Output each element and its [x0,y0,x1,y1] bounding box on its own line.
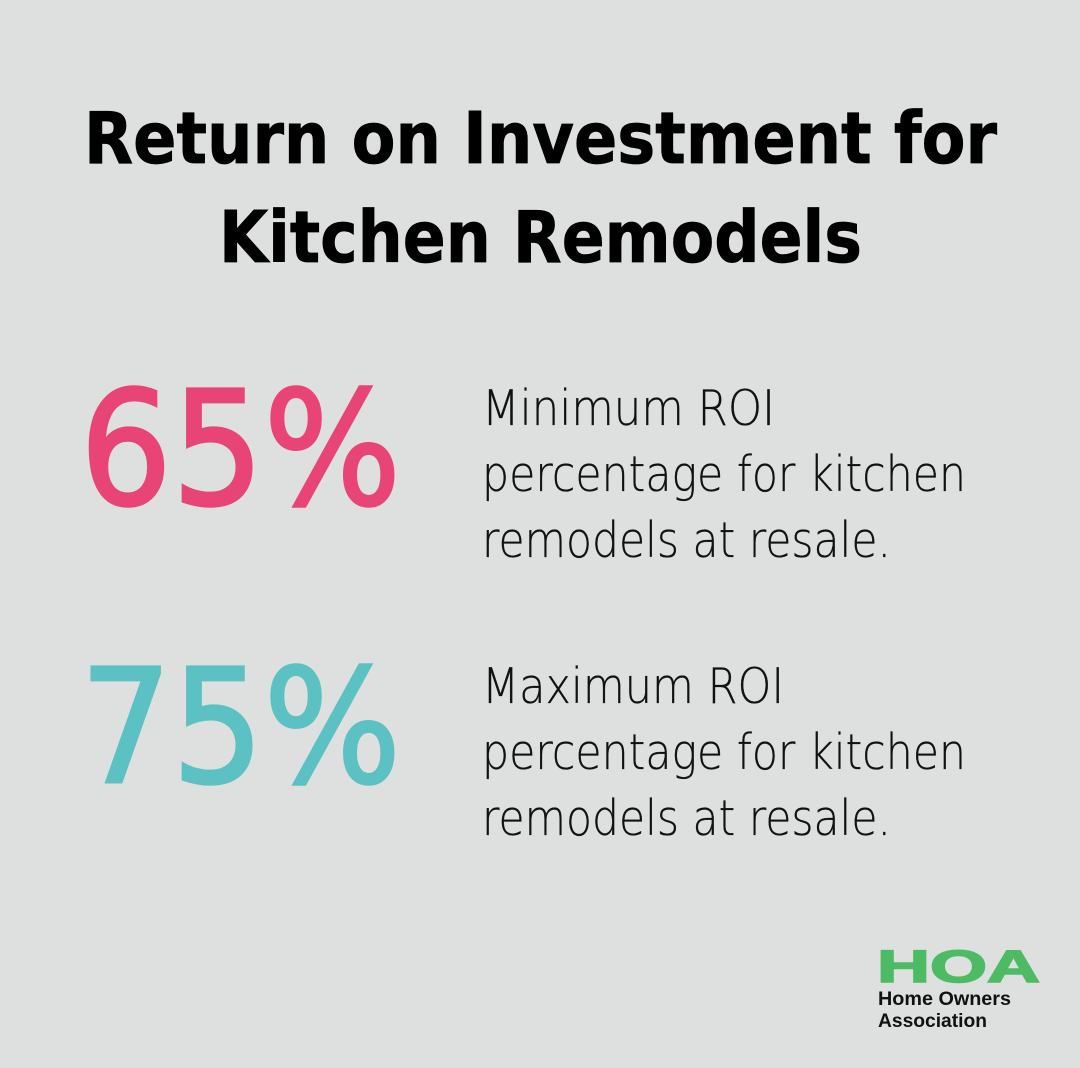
stat: 75% maximum ROI [80,636,966,847]
logo: HOA Home Owners Association [877,941,1040,1032]
stat value: 75%: 75% [80,636,401,820]
stat description: maximum ROI: Maximum ROI [482,658,784,715]
title: Kitchen Remodels [219,196,862,279]
stat description: maximum ROI [482,658,966,847]
logo text: Home Owners Association [878,989,1011,1032]
stat description: maximum ROI: remodels at resale. [482,790,891,847]
logo text: Home Owners Association: Association [878,1011,987,1032]
logo mark: HOA: HOA [877,941,1040,992]
stat description: minimum ROI [482,380,966,569]
stat description: minimum ROI: Minimum ROI [482,380,775,437]
logo text: Home Owners Association: Home Owners [878,989,1011,1010]
stat: 65% minimum ROI [80,358,966,569]
stat description: maximum ROI: percentage for kitchen [482,724,966,781]
title: Return on Investment for [84,97,997,180]
stat description: minimum ROI: percentage for kitchen [482,446,966,503]
title [84,97,997,279]
stat value: 65%: 65% [80,358,401,542]
stat description: minimum ROI: remodels at resale. [482,512,891,569]
